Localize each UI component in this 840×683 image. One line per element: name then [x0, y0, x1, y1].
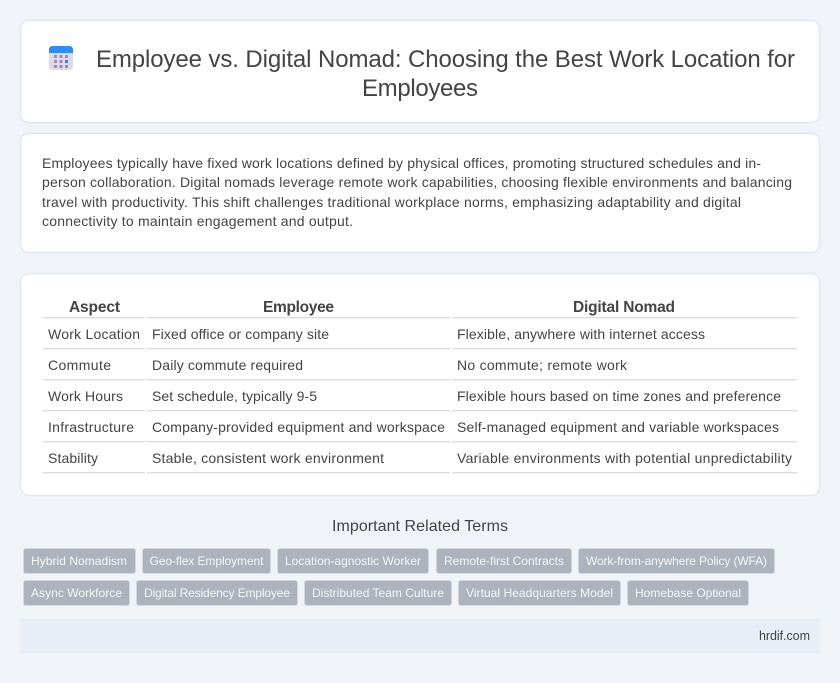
tag: Distributed Team Culture: [304, 580, 452, 606]
tag: Digital Residency Employee: Digital Residency Employee: [144, 586, 290, 600]
row: infrastructure: Infrastructure: [48, 419, 134, 435]
text block: introduction paragraph: Employees typically have fixed work locations defined by physical offices, promoting structured schedules and in-: [42, 155, 761, 171]
tag: Async Workforce: [24, 580, 130, 606]
tag: Virtual Headquarters Model: [458, 580, 620, 606]
footer: [20, 619, 820, 653]
row: stability: Stable, consistent work environment: [152, 450, 384, 466]
text block: introduction paragraph: person collaboration. Digital nomads leverage remote work capabilities, choosing flexible environments and balancing: [42, 174, 792, 190]
footer: source: hrdif.com: [759, 629, 810, 643]
row: work hours: Flexible hours based on time zones and preference: [457, 388, 781, 404]
panel: introduction: [20, 134, 820, 252]
tag: Geo-flex Employment: [142, 548, 270, 574]
row: work location: Fixed office or company site: [152, 326, 329, 342]
tag: Location-agnostic Worker: [278, 548, 428, 574]
tag: Work-from-anywhere Policy: Work-from-anywhere Policy (WFA): [586, 554, 767, 568]
icon: calendar: [49, 46, 73, 70]
panel: comparison table: [20, 274, 820, 496]
row: commute: Daily commute required: [152, 357, 303, 373]
panel: header: [20, 20, 820, 122]
row: work hours: Work Hours: [48, 388, 123, 404]
title: Employee vs. Digital Nomad: Choosing the Best Work Location for: [96, 46, 795, 73]
tag: Location-agnostic Worker: Location-agnostic Worker: [285, 554, 421, 568]
row: work hours: [48, 388, 781, 404]
tag: Hybrid Nomadism: Hybrid Nomadism: [31, 554, 127, 568]
tag: Distributed Team Culture: Distributed Team Culture: [312, 586, 444, 600]
table header: [69, 299, 675, 316]
row: commute: Commute: [48, 357, 111, 373]
row: stability: [48, 450, 792, 466]
row: work location: Work Location: [48, 326, 140, 342]
table header: Aspect: [69, 299, 120, 316]
row: infrastructure: Company-provided equipment and workspace: [152, 419, 445, 435]
row: commute: [48, 357, 628, 373]
row: commute: No commute; remote work: [457, 357, 628, 373]
row: work location: Flexible, anywhere with internet access: [457, 326, 705, 342]
table header: Employee: [263, 299, 334, 316]
tag: Digital Residency Employee: [136, 580, 298, 606]
title: Employees: [362, 75, 478, 102]
tag: Remote-first Contracts: Remote-first Contracts: [444, 554, 564, 568]
row: work hours: Set schedule, typically 9-5: [152, 388, 317, 404]
tag: Work-from-anywhere Policy: [578, 548, 774, 574]
tag list: related terms: [24, 548, 774, 606]
tag: Geo-flex Employment: Geo-flex Employment: [150, 554, 264, 568]
row: infrastructure: [48, 419, 779, 435]
tag: Homebase Optional: [628, 580, 748, 606]
tag: Remote-first Contracts: [436, 548, 572, 574]
table header: Digital Nomad: [573, 299, 675, 316]
row: stability: Variable environments with potential unpredictability: [457, 450, 792, 466]
tag: Hybrid Nomadism: [24, 548, 136, 574]
text block: introduction paragraph: [42, 155, 792, 229]
tag: Homebase Optional: Homebase Optional: [635, 586, 741, 600]
text block: introduction paragraph: connectivity to maintain engagement and output.: [42, 213, 353, 229]
row: stability: Stability: [48, 450, 98, 466]
heading: important related terms: Important Related Terms: [332, 518, 508, 535]
text block: introduction paragraph: travel with productivity. This shift challenges traditional workplace norms, emphasizing adaptability and digital: [42, 194, 741, 210]
row: infrastructure: Self-managed equipment and variable workspaces: [457, 419, 779, 435]
tag: Virtual Headquarters Model: Virtual Headquarters Model: [466, 586, 613, 600]
title: [96, 46, 795, 102]
tag: Async Workforce: Async Workforce: [31, 586, 122, 600]
row: work location: [48, 326, 705, 342]
